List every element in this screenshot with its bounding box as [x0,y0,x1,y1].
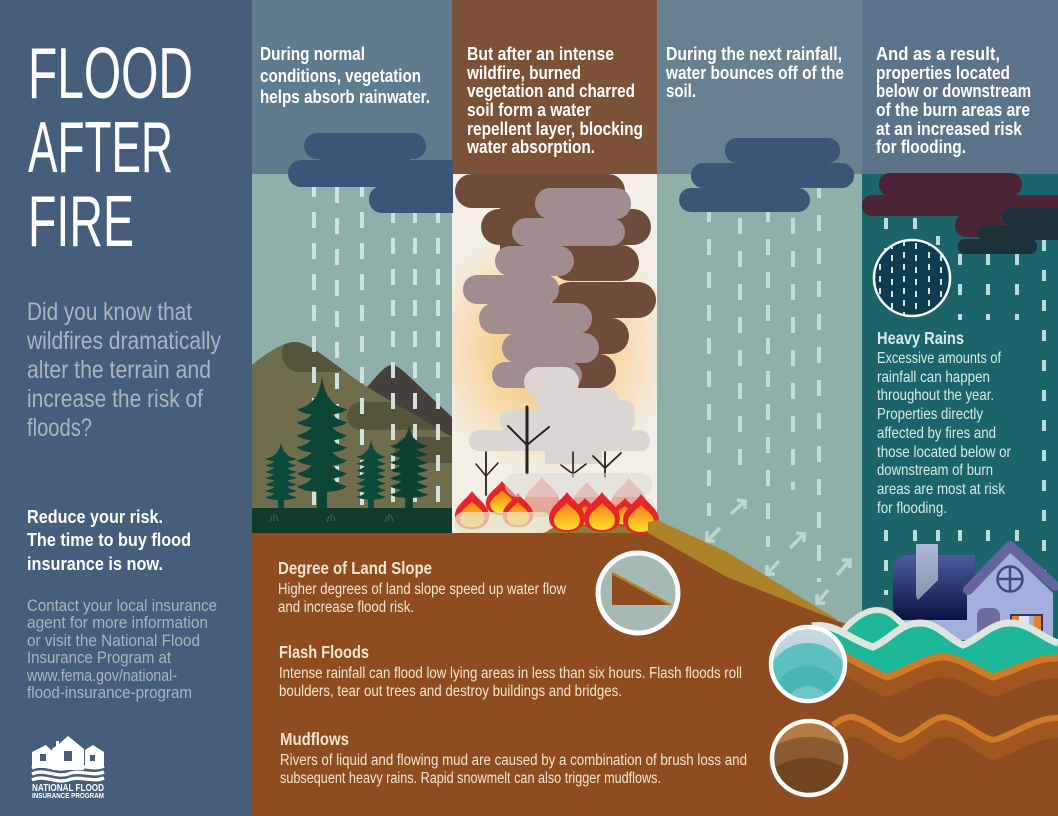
logo: National Flood Insurance Program: INSURANCE PROGRAM [32,791,104,800]
text: heavy rains [877,328,1012,517]
rain: normal conditions [314,181,438,505]
contact information: flood-insurance-program [27,683,192,702]
title [28,34,193,262]
text: after wildfire [466,44,643,157]
rain: flooding [886,218,1044,640]
text: mudflows: Rivers of liquid and flowing mud are caused by a combination of brush loss and [280,752,747,769]
text: after wildfire: soil form a water [467,100,591,120]
text: heavy rains: affected by fires and [877,425,996,442]
text: mudflows: subsequent heavy rains. Rapid snowmelt can also trigger mudflows. [280,770,661,787]
burned trees [476,407,621,495]
flames [454,473,659,534]
text: as a result: at an increased risk [876,119,1023,139]
text: heavy rains: for flooding. [877,500,947,517]
title: AFTER [28,108,173,188]
text: after wildfire: water absorption. [466,137,595,157]
flood waves [812,610,1058,700]
intro question: wildfires dramatically [26,327,221,355]
text: heavy rains: those located below or [877,444,1012,461]
logo: National Flood Insurance Program [32,736,104,800]
intro question: alter the terrain and [27,356,211,384]
text: heavy rains: Heavy Rains [877,328,964,348]
text: normal conditions: helps absorb rainwater. [260,87,430,107]
text: after wildfire: wildfire, burned [466,63,581,83]
icon: flash flood circle [768,624,848,704]
contact information: agent for more information [27,613,208,632]
text: flash floods: Flash Floods [279,642,369,662]
intro question: floods? [27,414,92,442]
smoke: mauve plume [463,188,631,388]
text: next rainfall: water bounces off of the [665,63,844,83]
text: normal conditions [260,44,430,107]
arrows: water bouncing off soil [707,500,850,603]
earth waves [812,650,1058,816]
icon: land slope circle [598,553,678,633]
contact information: Contact your local insurance [27,596,217,615]
panel: normal conditions background [252,0,452,534]
land: olive ridge under the fire [540,520,657,534]
panel: next rainfall background [657,0,862,634]
land: golden slope and brown earth [252,520,1058,816]
trees [266,376,428,508]
text: heavy rains: Properties directly [877,406,983,423]
title: FLOOD [28,34,193,114]
text: heavy rains: throughout the year. [877,387,994,404]
text: as a result: below or downstream [876,81,1031,101]
intro question: Did you know that [27,298,192,326]
text: mudflows: Mudflows [280,729,349,749]
cloud: dark storm cloud [958,208,1058,254]
smoke: dark plume [455,174,656,388]
text: heavy rains: Excessive amounts of [877,350,1001,367]
text: next rainfall [665,44,844,101]
text: after wildfire: vegetation and charred [467,81,635,101]
text: after wildfire: But after an intense [467,44,614,64]
logo: National Flood Insurance Program: NATIONAL FLOOD [32,783,104,794]
contact information [26,596,217,702]
ground: forest floor [252,508,452,533]
text: as a result: properties located [876,63,1010,83]
title: FIRE [28,182,134,262]
call to action [27,506,191,574]
intro question: increase the risk of [27,385,203,413]
rain: next rainfall [709,182,819,582]
icon: heavy rain circle [874,240,950,316]
text: next rainfall: During the next rainfall, [666,44,842,64]
text: heavy rains: rainfall can happen [877,369,990,386]
intro question [26,298,221,442]
text: normal conditions: During normal [260,44,365,64]
call to action: The time to buy flood [27,529,191,550]
text: normal conditions: conditions, vegetation [260,66,421,86]
text: flash floods [279,642,742,700]
text: degree of land slope [278,558,567,616]
text: mudflows [280,729,747,787]
smoke: pale cloud [469,367,650,464]
text: degree of land slope: Higher degrees of land slope speed up water flow [278,581,567,598]
house [893,544,1055,645]
contact information: or visit the National Flood [27,631,200,650]
contact information: www.fema.gov/national- [26,666,177,685]
text: flash floods: Intense rainfall can flood low lying areas in less than six hours. Flash floods roll [279,665,742,682]
text: next rainfall: soil. [666,81,696,101]
cloud: next rainfall [679,138,854,212]
panel: flooding background [862,0,1058,654]
text: degree of land slope: Degree of Land Slope [278,558,432,578]
call to action: Reduce your risk. [27,506,163,527]
icon: mudflow circle [770,718,848,798]
mountains [252,342,452,508]
panel: burning column background [452,0,657,534]
text: degree of land slope: and increase flood risk. [278,599,414,616]
call to action: insurance is now. [27,553,163,574]
text: heavy rains: downstream of burn [877,462,993,479]
cloud: maroon storm cloud [862,173,1058,237]
panel: left sidebar [0,0,252,816]
text: heavy rains: areas are most at risk [877,481,1006,498]
text: as a result: And as a result, [876,44,1000,64]
text: as a result [876,44,1031,157]
contact information: Insurance Program at [27,648,171,667]
cloud: normal conditions [288,133,453,213]
text: as a result: for flooding. [876,137,966,157]
text: as a result: of the burn areas are [876,100,1030,120]
text: flash floods: boulders, tear out trees and destroy buildings and bridges. [279,683,622,700]
text: after wildfire: repellent layer, blocking [467,119,643,139]
